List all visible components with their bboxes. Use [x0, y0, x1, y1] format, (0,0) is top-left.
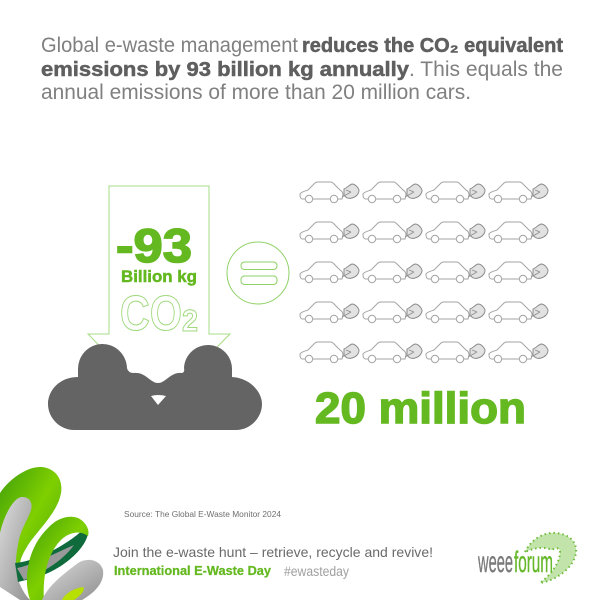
logo: e-waste day swirl	[0, 467, 103, 600]
cloud notch	[151, 395, 166, 405]
icon: dark cloud	[48, 344, 262, 430]
logo: weeeforum	[478, 533, 576, 583]
car grid	[300, 182, 548, 363]
heading: emissions by 93 billion kg annually	[41, 59, 410, 81]
hashtag: #ewasteday	[284, 564, 349, 579]
label: CO2 outline: CO	[120, 287, 182, 341]
label: CO2 outline: 2	[182, 303, 198, 338]
icon: down arrow	[88, 186, 230, 406]
heading: reduces the CO₂ equivalent	[302, 35, 563, 57]
source: Source: The Global E-Waste Monitor 2024	[124, 509, 281, 519]
logo: weeeforum: weee	[478, 546, 513, 579]
icon: equals sign	[227, 242, 289, 304]
heading	[41, 34, 563, 104]
heading: Global e-waste management	[41, 34, 298, 57]
tagline: Join the e-waste hunt – retrieve, recycle and revive!	[113, 544, 433, 560]
label: International E-Waste Day: International E-Waste Day	[114, 564, 271, 578]
value: -93: -93	[116, 219, 192, 272]
logo: weeeforum: forum	[514, 546, 553, 579]
heading: . This equals the	[409, 58, 563, 81]
label: billion kg: Billion kg	[121, 267, 197, 286]
heading: annual emissions of more than 20 million cars.	[41, 81, 471, 104]
value: 20 million: 20 million	[315, 384, 526, 433]
